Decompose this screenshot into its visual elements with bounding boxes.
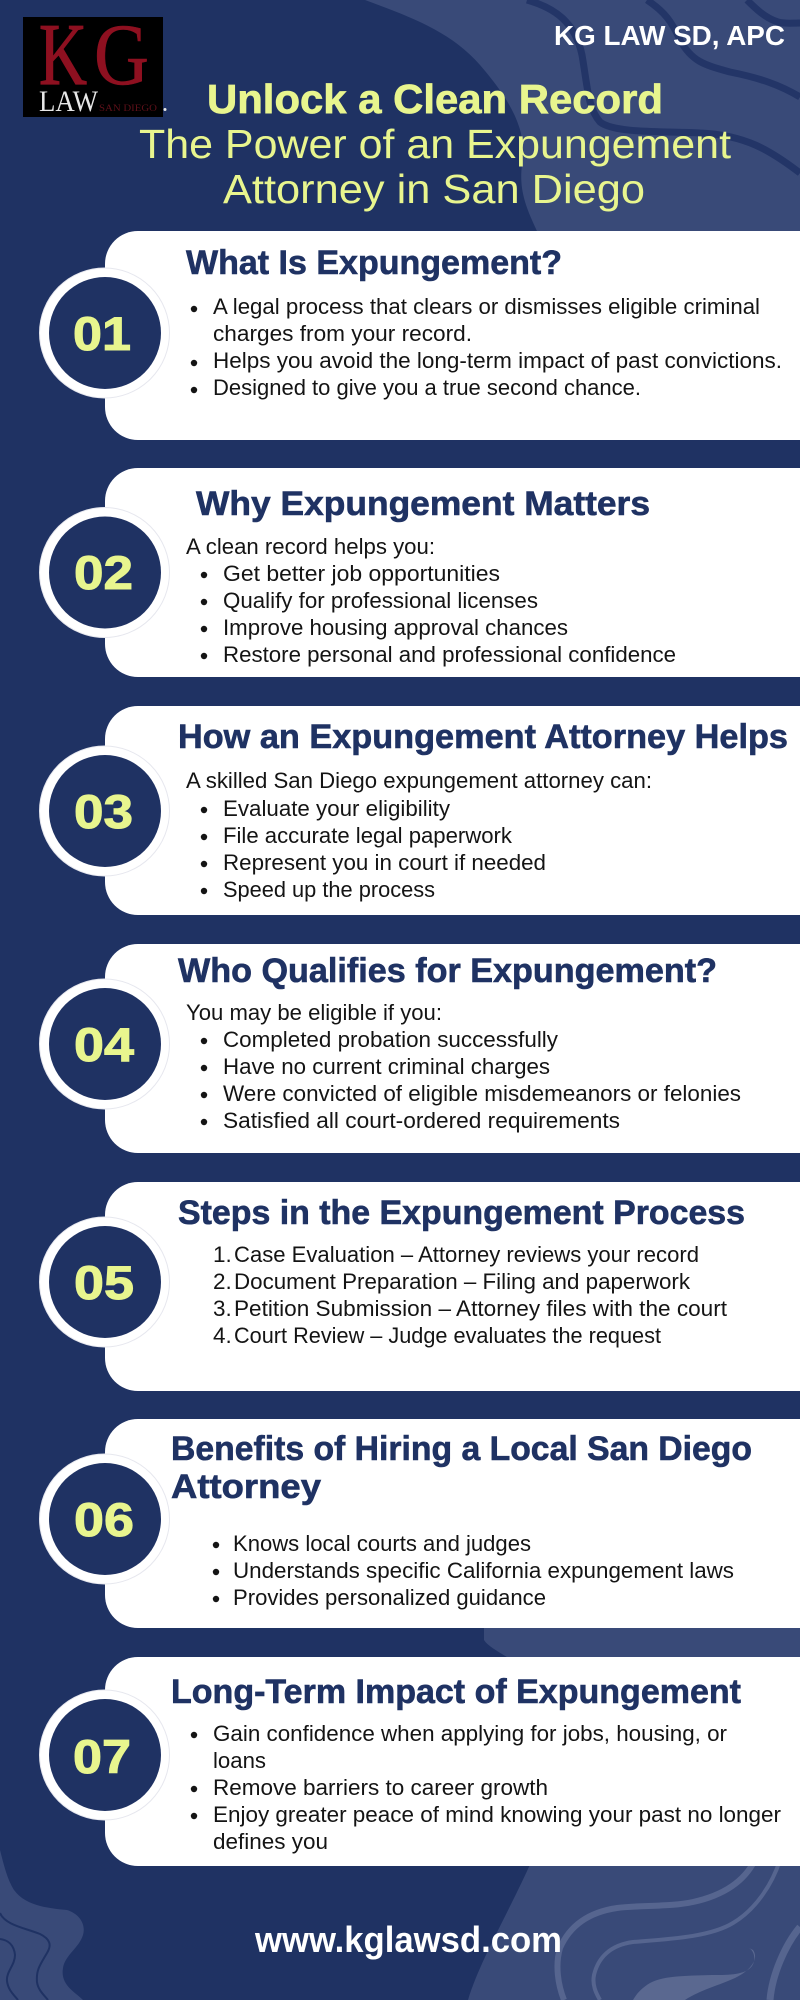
intro and bullets: Completed probation successfully bbox=[223, 1027, 559, 1052]
badge 03 bbox=[40, 746, 170, 876]
numbered list: 2. bbox=[213, 1269, 232, 1294]
badge 01 bbox=[40, 268, 170, 398]
badge 05 bbox=[40, 1217, 170, 1347]
firm name: KG LAW SD, APC bbox=[554, 20, 785, 51]
bullet list: defines you bbox=[213, 1829, 328, 1854]
title: Unlock a Clean Record bbox=[207, 76, 663, 122]
badge 06 bbox=[40, 1454, 170, 1584]
badge 02: 02 bbox=[74, 546, 133, 599]
intro and bullets bbox=[186, 1000, 741, 1133]
bullet list bbox=[191, 1721, 782, 1854]
panel: 05 steps in the process bbox=[40, 1182, 800, 1391]
background shape: bottom right blob with lines bbox=[468, 1860, 800, 2000]
bullet list: Helps you avoid the long-term impact of past convictions. bbox=[213, 348, 782, 373]
numbered list: Court Review – Judge evaluates the request bbox=[234, 1323, 662, 1348]
heading: Why Expungement Matters bbox=[196, 485, 650, 523]
badge 05: 05 bbox=[74, 1256, 134, 1309]
bullet list: Understands specific California expungement laws bbox=[233, 1558, 734, 1583]
badge 04 bbox=[40, 979, 170, 1109]
heading: What Is Expungement? bbox=[186, 244, 562, 282]
background shape: lower right blob between cards bbox=[484, 1625, 800, 1660]
intro and bullets: Represent you in court if needed bbox=[223, 850, 546, 875]
heading: Steps in the Expungement Process bbox=[178, 1194, 745, 1232]
badge 07 bbox=[40, 1690, 170, 1820]
heading: Long-Term Impact of Expungement bbox=[171, 1673, 741, 1711]
background shape: top right blob with wavy lines bbox=[365, 0, 800, 240]
intro and bullets: Evaluate your eligibility bbox=[223, 796, 451, 821]
intro and bullets: A clean record helps you: bbox=[186, 534, 435, 559]
logo: G bbox=[94, 7, 149, 104]
intro and bullets: You may be eligible if you: bbox=[186, 1000, 442, 1025]
heading: How an Expungement Attorney Helps bbox=[178, 718, 788, 756]
heading: Attorney bbox=[171, 1468, 321, 1506]
intro and bullets: Satisfied all court-ordered requirements bbox=[223, 1108, 620, 1133]
bullet list: Gain confidence when applying for jobs, housing, or bbox=[213, 1721, 728, 1746]
panel: 02 why expungement matters bbox=[40, 468, 800, 677]
intro and bullets: Get better job opportunities bbox=[223, 561, 500, 586]
numbered list: 3. bbox=[213, 1296, 232, 1321]
logo: LAW bbox=[39, 85, 99, 118]
numbered list: Case Evaluation – Attorney reviews your record bbox=[234, 1242, 699, 1267]
badge 01: 01 bbox=[73, 307, 131, 360]
intro and bullets: Have no current criminal charges bbox=[223, 1054, 550, 1079]
numbered list: Petition Submission – Attorney files with the court bbox=[234, 1296, 728, 1321]
bullet list: loans bbox=[213, 1748, 266, 1773]
badge 03: 03 bbox=[74, 785, 133, 838]
numbered list bbox=[213, 1242, 728, 1348]
badge 07: 07 bbox=[73, 1730, 131, 1783]
badge 04: 04 bbox=[74, 1018, 134, 1071]
panel: 04 who qualifies bbox=[40, 944, 800, 1153]
bullet list: charges from your record. bbox=[213, 321, 472, 346]
bullet list: Remove barriers to career growth bbox=[213, 1775, 548, 1800]
bullet list bbox=[191, 294, 782, 400]
bullet list: Designed to give you a true second chance. bbox=[213, 375, 641, 400]
title: Attorney in San Diego bbox=[223, 166, 645, 212]
bullet list: Enjoy greater peace of mind knowing your past no longer bbox=[213, 1802, 782, 1827]
intro and bullets: Were convicted of eligible misdemeanors or felonies bbox=[223, 1081, 741, 1106]
intro and bullets: A skilled San Diego expungement attorney can: bbox=[186, 768, 652, 793]
website url: www.kglawsd.com bbox=[254, 1919, 562, 1960]
panel: 01 what is expungement bbox=[40, 231, 800, 440]
panel: 07 long-term impact bbox=[40, 1657, 800, 1866]
logo bbox=[23, 7, 166, 118]
bullet list: Provides personalized guidance bbox=[233, 1585, 546, 1610]
heading bbox=[171, 1430, 752, 1506]
numbered list: 1. bbox=[213, 1242, 232, 1267]
title bbox=[139, 76, 732, 212]
intro and bullets bbox=[186, 768, 652, 902]
badge 06: 06 bbox=[74, 1493, 134, 1546]
bullet list bbox=[213, 1531, 734, 1610]
heading: Who Qualifies for Expungement? bbox=[178, 952, 717, 990]
panel: 06 benefits of local attorney bbox=[40, 1419, 800, 1628]
intro and bullets bbox=[186, 534, 676, 667]
badge 02 bbox=[40, 508, 170, 638]
intro and bullets: Restore personal and professional confidence bbox=[223, 642, 676, 667]
logo: SAN DIEGO bbox=[99, 103, 158, 113]
numbered list: Document Preparation – Filing and paperwork bbox=[234, 1269, 691, 1294]
intro and bullets: File accurate legal paperwork bbox=[223, 823, 513, 848]
intro and bullets: Speed up the process bbox=[223, 877, 435, 902]
numbered list: 4. bbox=[213, 1323, 232, 1348]
title: The Power of an Expungement bbox=[139, 121, 732, 167]
intro and bullets: Improve housing approval chances bbox=[223, 615, 568, 640]
panel: 03 how an attorney helps bbox=[40, 706, 800, 915]
heading: Benefits of Hiring a Local San Diego bbox=[171, 1430, 752, 1468]
bullet list: A legal process that clears or dismisses eligible criminal bbox=[213, 294, 760, 319]
background shape: bottom left blob bbox=[0, 1850, 84, 2000]
intro and bullets: Qualify for professional licenses bbox=[223, 588, 538, 613]
logo: K bbox=[39, 7, 87, 104]
bullet list: Knows local courts and judges bbox=[233, 1531, 531, 1556]
